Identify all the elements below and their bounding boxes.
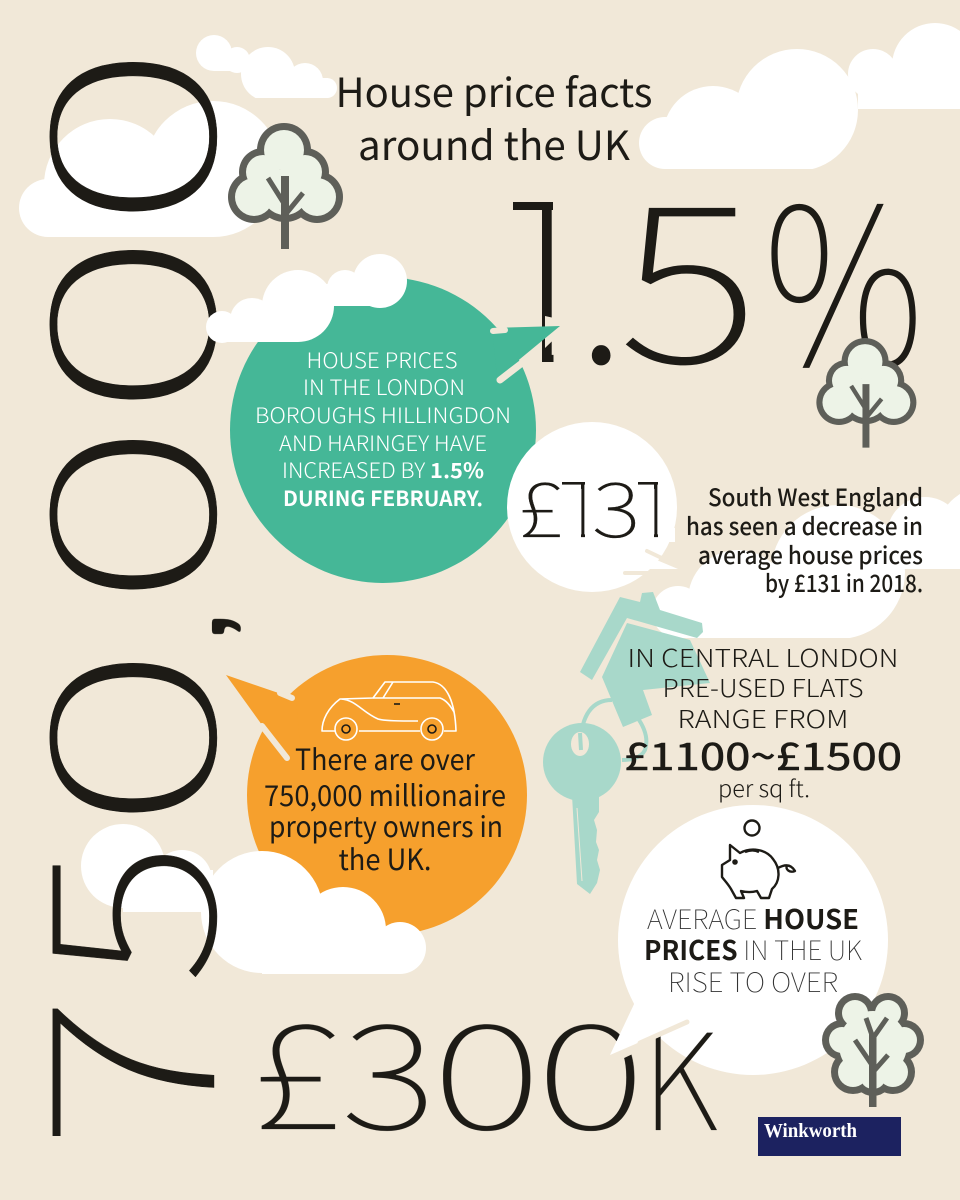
stat: £131: [518, 449, 675, 560]
text: teal circle: BOROUGHS HILLINGDON: [255, 400, 511, 430]
stat: 1.5%: [440, 109, 924, 428]
stat: £131: 3: [592, 450, 640, 559]
text: teal circle: [255, 345, 511, 513]
house fob body: [602, 623, 710, 727]
text: South West England: average house prices: [698, 536, 923, 571]
house fob roof: [580, 592, 703, 680]
stat: £300K: 3: [341, 959, 436, 1171]
stat: 1.5%: 5: [619, 110, 759, 425]
icon: key and house fob: [543, 592, 710, 894]
logo: Winkworth: Winkworth: [764, 1120, 857, 1142]
icon: vintage car: [322, 682, 456, 740]
text: millionaire property owners: There are over: [295, 737, 476, 779]
title: around the UK: [358, 114, 630, 172]
text: central London prices: PRE-USED FLATS: [662, 669, 864, 705]
cloud: over teal circle: [206, 254, 407, 343]
text: average house prices: RISE TO OVER: [668, 961, 838, 1000]
panel: teal circle with tail: [230, 277, 572, 583]
stat: £131: 1: [635, 449, 674, 559]
cloud: right back: [888, 494, 960, 569]
big rotated number 750,000: ,: [107, 601, 253, 652]
panel: white circle average house prices: [618, 805, 888, 1075]
cloud: left large: [19, 101, 268, 237]
panel: white circle £131 with tail: [507, 422, 678, 592]
text: teal circle: AND HARINGEY HAVE: [279, 428, 487, 458]
text: South West England: South West England: [708, 478, 923, 513]
text: millionaire property owners: [264, 737, 506, 879]
stat: £131: 1: [562, 449, 601, 559]
text: South West England: by £131 in 2018.: [765, 564, 923, 599]
text: teal circle: DURING FEBRUARY.: [283, 483, 483, 513]
text: average house prices: AVERAGE HOUSE: [647, 898, 859, 937]
cloud: top right front: [639, 49, 858, 169]
icon: piggy bank: [722, 820, 795, 898]
stat: £131: £: [518, 450, 565, 560]
title: [336, 61, 652, 172]
text: central London prices: RANGE FROM: [678, 700, 848, 736]
text: South West England: has seen a decrease in: [686, 507, 923, 542]
text: central London prices: IN CENTRAL LONDON: [628, 639, 898, 675]
text: millionaire property owners: the UK.: [338, 837, 432, 879]
stat: £300K: £: [250, 959, 346, 1171]
text: teal circle: IN THE LONDON: [303, 372, 465, 402]
key ring links: [580, 700, 646, 760]
stat: £300K: 0: [536, 960, 646, 1172]
cloud: right front: [652, 505, 905, 650]
text: average house prices: PRICES IN THE UK: [644, 929, 863, 968]
cloud: top small: [196, 35, 337, 101]
text: central London prices: [624, 639, 902, 804]
text: central London prices: £1100~£1500: [624, 726, 902, 781]
text: average house prices: [644, 898, 863, 1000]
speech tail: average house prices: [610, 1000, 700, 1056]
text: central London prices: per sq ft.: [718, 770, 810, 804]
icon: tree top left: [228, 123, 343, 249]
title: House price facts: [336, 61, 652, 119]
text: teal circle: INCREASED BY 1.5%: [282, 455, 484, 485]
icon: tree bottom right: [822, 993, 924, 1107]
icon: tree right: [816, 338, 916, 448]
logo: Winkworth: [758, 1117, 901, 1156]
stat: £300K: 0: [432, 960, 542, 1172]
stat: 1.5%: %: [763, 112, 924, 428]
text: millionaire property owners: property owners in: [269, 804, 503, 846]
panel: orange circle with tail: [226, 655, 527, 935]
big rotated number 750,000: [0, 42, 281, 1150]
text: South West England: [686, 478, 923, 599]
text: millionaire property owners: 750,000 millionaire: [264, 773, 506, 815]
cloud: top right back: [848, 23, 960, 109]
cloud: bottom left front: [201, 851, 426, 974]
stat: £300K: [250, 959, 718, 1172]
stat: £300K: K: [642, 975, 718, 1169]
stat: 1.5%: .: [576, 109, 626, 425]
stat: 1.5%: 1: [468, 109, 615, 425]
cloud: bottom left back: [81, 824, 213, 912]
text: teal circle: HOUSE PRICES: [306, 345, 458, 375]
key body: [543, 723, 621, 894]
